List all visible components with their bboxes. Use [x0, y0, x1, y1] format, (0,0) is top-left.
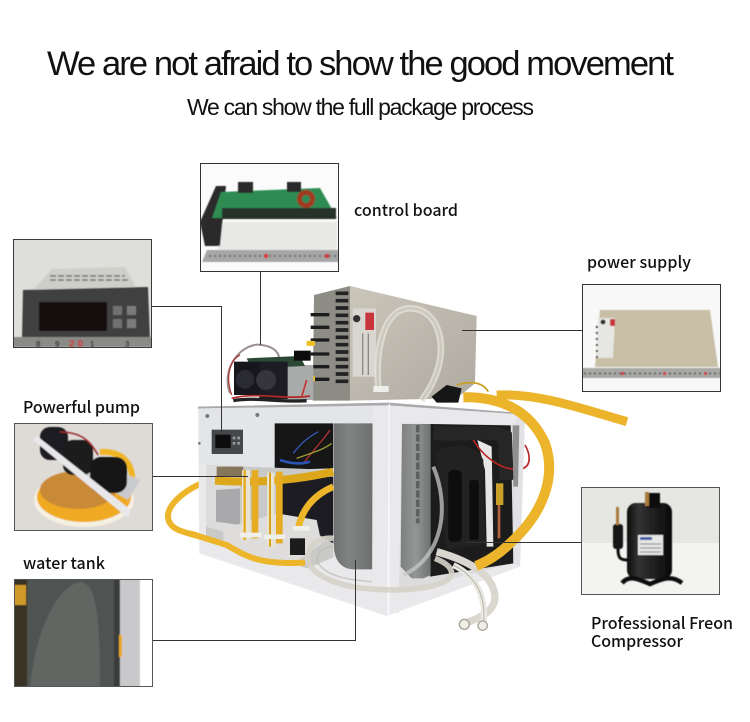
compressor black filter — [448, 470, 462, 542]
control board line — [260, 271, 262, 345]
pcb — [212, 188, 337, 218]
coloured wires — [280, 430, 332, 463]
screw terminals — [311, 315, 329, 379]
dark wiring window — [275, 423, 333, 470]
control board and fans on top — [228, 345, 313, 401]
black relay — [294, 351, 311, 361]
label: control board: control board — [354, 197, 458, 221]
power supply side plate — [350, 286, 477, 401]
relay — [238, 182, 253, 193]
heatsink — [215, 222, 337, 250]
insulation pipe top — [433, 433, 507, 480]
tank vertical lettering — [412, 425, 423, 523]
inner ring highlight — [317, 547, 372, 582]
leader lines — [152, 271, 582, 640]
pump black fitting — [290, 538, 305, 555]
red wire loop — [473, 440, 529, 469]
fan left — [234, 362, 260, 395]
vent strip — [217, 467, 243, 476]
label sticker — [353, 308, 376, 377]
pump vertical hoses — [245, 470, 279, 547]
red wires — [60, 432, 98, 455]
photo frame: water tank — [14, 580, 152, 686]
display housing — [212, 430, 243, 454]
toroid coil — [297, 190, 315, 208]
power supply unit — [307, 286, 477, 401]
top pipe — [647, 493, 660, 508]
yellow hose coil — [34, 486, 134, 527]
clear tube ring around base — [308, 538, 452, 590]
photo: temperature display: 1 — [90, 340, 95, 349]
label: professional freon compressor: Professional Freon — [591, 610, 733, 634]
photo: water tank — [15, 580, 140, 686]
pump bracket white — [223, 513, 322, 563]
ruler strip — [13, 337, 152, 347]
vent slots — [336, 293, 348, 381]
photo frame: pump — [14, 424, 152, 530]
photo frame: display — [14, 240, 152, 348]
cable ties — [240, 528, 310, 537]
red wire — [229, 355, 240, 395]
terminal row — [222, 208, 336, 219]
photo frame: control board — [200, 164, 338, 272]
photo frame: power supply — [582, 284, 720, 392]
pump bay light panel — [206, 465, 240, 537]
fan right — [259, 362, 288, 399]
inner clear tube — [403, 467, 442, 575]
photo: compressor — [581, 487, 720, 595]
label — [638, 535, 663, 555]
back label — [33, 267, 137, 290]
label: power supply: power supply — [587, 249, 691, 273]
white frame — [198, 403, 525, 616]
front pillar — [372, 406, 402, 613]
tube clamp — [373, 386, 389, 392]
label: professional freon compressor: Compressor — [591, 628, 683, 652]
white background — [140, 579, 153, 687]
frame bolts — [198, 413, 259, 445]
central chiller machine — [168, 286, 627, 630]
yellow hoses inside — [215, 472, 333, 482]
red lead — [302, 380, 307, 397]
ruler — [202, 250, 339, 262]
photo: temperature display: 8 — [36, 340, 41, 349]
trailing clear tubes — [437, 552, 495, 623]
heat sink — [285, 365, 313, 400]
rear yellow hose — [497, 395, 627, 422]
left front panel — [199, 406, 388, 470]
base wires — [232, 396, 310, 398]
second tank — [401, 424, 431, 578]
sticker — [596, 318, 615, 358]
photo: temperature display: 9 — [55, 340, 60, 349]
tank body — [334, 423, 373, 569]
power supply terminal face — [313, 286, 350, 401]
insulated dark interior — [430, 424, 513, 577]
tube ends — [459, 619, 469, 629]
accumulator — [613, 524, 623, 549]
control display — [212, 430, 243, 454]
power wires — [457, 383, 488, 392]
compressor shadowed body — [435, 445, 485, 550]
photo: pump — [14, 423, 153, 531]
supply plate — [595, 310, 718, 367]
display screen — [215, 435, 231, 448]
dark rear of pump bay — [280, 477, 333, 543]
water tank front — [334, 423, 373, 569]
main yellow hose over frame — [463, 397, 549, 566]
power supply line — [462, 330, 582, 332]
front bracket strip — [33, 436, 131, 518]
screws — [596, 326, 598, 358]
title: We are not afraid to show the good movement — [47, 45, 674, 83]
subtitle: We can show the full package process — [187, 94, 534, 120]
compressor shell — [627, 503, 672, 579]
right window — [399, 423, 515, 592]
label: professional freon compressor — [591, 610, 733, 652]
terminal connectors — [307, 343, 315, 379]
power plug — [432, 385, 462, 403]
display buttons — [233, 437, 240, 445]
right dark band — [114, 579, 120, 687]
label: water tank: water tank — [23, 550, 106, 574]
frame top shadow — [198, 403, 525, 415]
wire loop — [228, 345, 279, 393]
controller body — [22, 287, 150, 340]
yellow hose bottom — [190, 533, 305, 563]
left clutter — [14, 579, 27, 687]
frame bar — [120, 579, 140, 687]
tank highlight — [30, 582, 100, 687]
yellow accent — [119, 635, 122, 657]
fan block — [200, 186, 226, 246]
photo: control board — [201, 181, 338, 263]
brass valve — [496, 483, 503, 505]
green board — [247, 356, 305, 368]
water tank line — [153, 560, 356, 640]
clear tube coil on power supply — [378, 308, 441, 400]
right frame post — [513, 414, 525, 567]
compressor line — [466, 542, 581, 544]
pump cylinders — [40, 427, 68, 460]
photo: temperature display: 20 — [69, 339, 83, 350]
lower left opening — [206, 465, 333, 568]
ruler — [582, 368, 721, 378]
photo frame: compressor — [582, 488, 720, 594]
screen — [39, 302, 107, 331]
left yellow hose loop — [168, 484, 227, 545]
white gap behind compressor — [477, 440, 493, 547]
buttons — [113, 306, 122, 315]
mount feet — [622, 578, 682, 584]
photo: temperature display — [13, 239, 152, 350]
photo: power supply — [583, 309, 720, 379]
pump line — [153, 476, 248, 478]
rear bracket plate — [86, 472, 140, 501]
label: powerful pump: Powerful pump — [23, 394, 140, 418]
photo: temperature display: 3 — [125, 340, 130, 349]
display line — [152, 306, 222, 432]
